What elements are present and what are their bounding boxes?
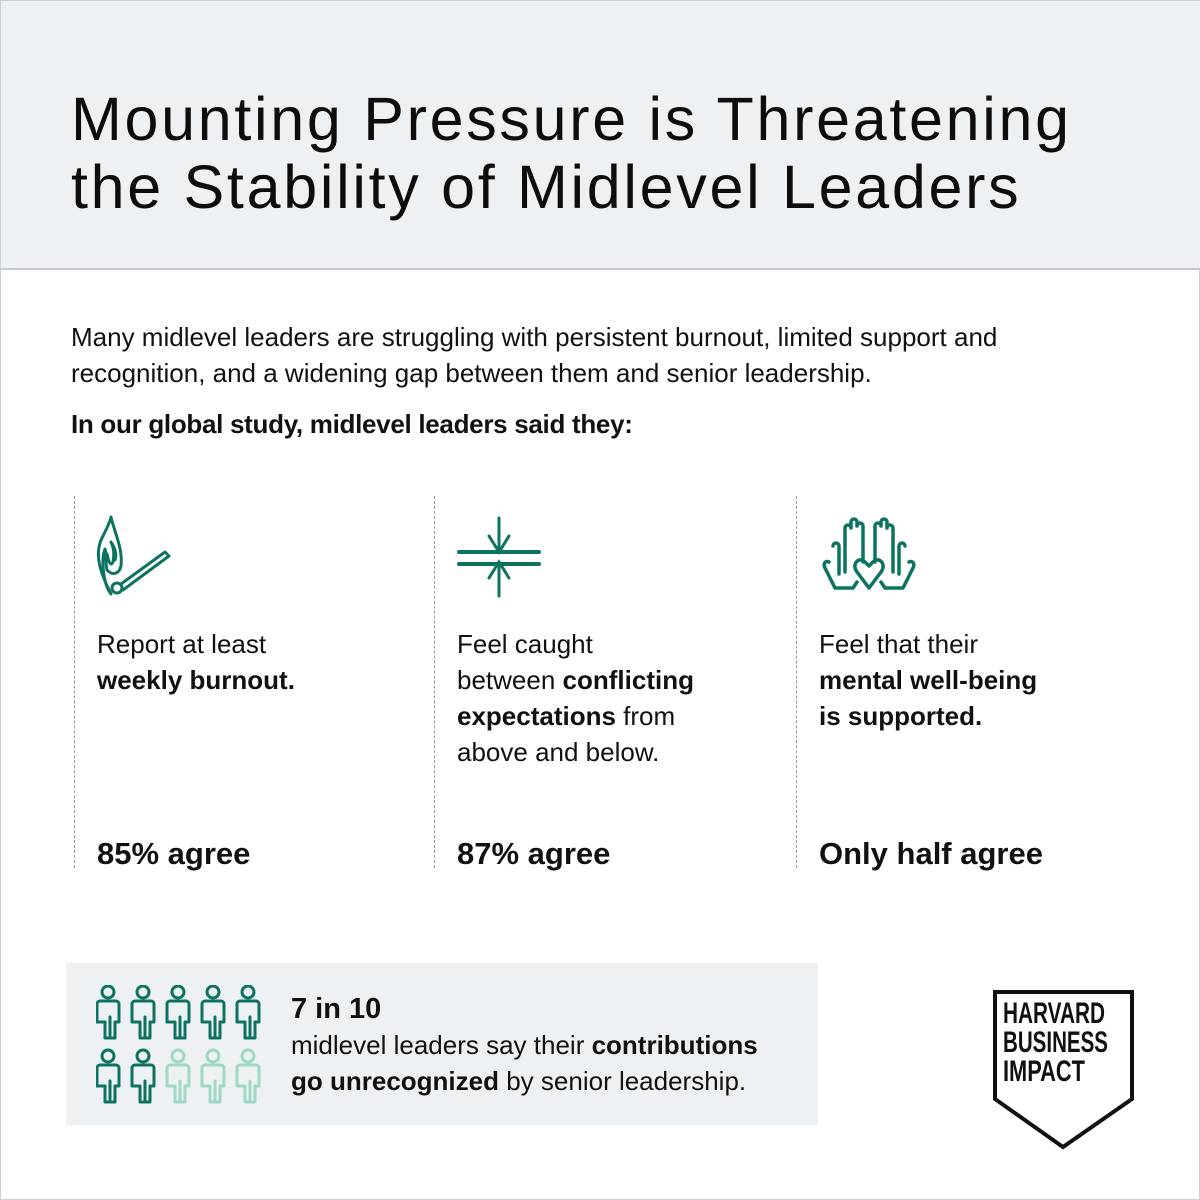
stat value: Only half agree [819, 836, 1043, 871]
panel: mental well-being [796, 496, 1156, 868]
stat text [96, 629, 295, 695]
callout box: recognition [66, 963, 818, 1125]
icon: compress arrows [457, 516, 541, 598]
stat value: 87% agree [457, 836, 610, 871]
icon: people grid 7 of 10 [96, 985, 260, 1104]
stat text: Feel that their [819, 629, 978, 659]
stat text: weekly burnout. [97, 665, 295, 695]
title: the Stability of Midlevel Leaders [71, 153, 1021, 221]
logo: Harvard Business Impact [993, 990, 1134, 1150]
icon: match flame [96, 516, 171, 596]
intro text: Many midlevel leaders are struggling with persistent burnout, limited support and recognition, and a widening gap between them and senior leadership. [71, 322, 997, 388]
title: Mounting Pressure is Threatening [71, 85, 1072, 153]
logo: Harvard Business Impact: IMPACT [1003, 1055, 1085, 1088]
title [71, 85, 1072, 221]
callout text: 7 in 10 [291, 993, 381, 1025]
stat text: Feel caught [457, 629, 593, 659]
panel: burnout [74, 496, 414, 868]
callout text: midlevel leaders say their contributions go unrecognized by senior leadership. [291, 1030, 758, 1096]
panel: conflicting expectations [434, 496, 794, 868]
lead-in text: In our global study, midlevel leaders said they: [71, 409, 633, 439]
callout text [291, 993, 758, 1096]
stat text: Report at least [97, 629, 266, 659]
stat text [819, 629, 1037, 731]
stat text: between conflicting expectations from above and below. [457, 665, 694, 767]
header band [1, 1, 1200, 270]
stat text: mental well-being is supported. [819, 665, 1037, 731]
icon: hands with heart [822, 517, 916, 590]
stat value: 85% agree [97, 836, 250, 871]
